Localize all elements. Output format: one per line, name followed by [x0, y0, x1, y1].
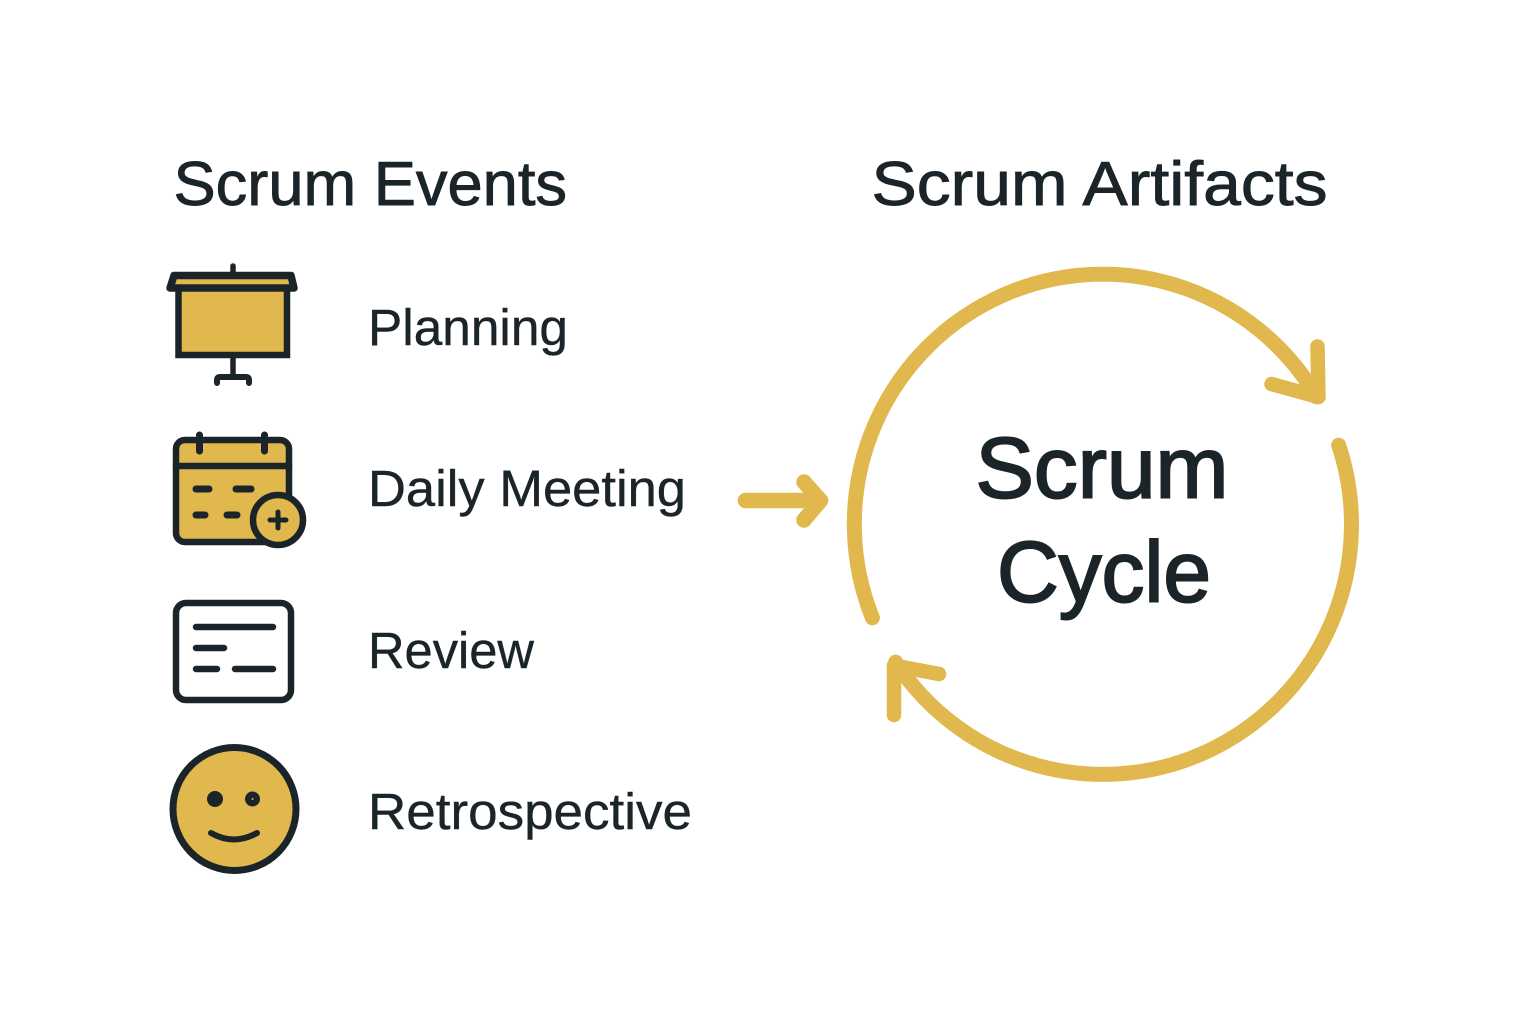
- arrowhead: top right: [1272, 346, 1318, 397]
- icon: projector screen: [170, 266, 294, 383]
- arrowhead: bottom left: [894, 666, 939, 715]
- label: Planning: Planning: [368, 299, 568, 356]
- heading: Scrum Artifacts: Scrum Artifacts: [872, 150, 1328, 219]
- arrow: events to cycle: [746, 482, 820, 520]
- cycle ring with arrows: [854, 274, 1351, 774]
- center label: Scrum Cycle: Scrum: [976, 420, 1228, 516]
- label: Review: Review: [368, 622, 534, 679]
- label: Retrospective: Retrospective: [368, 783, 692, 840]
- icon: smiley face: [173, 748, 296, 870]
- icon: calendar: [176, 435, 303, 545]
- center label: Scrum Cycle: [976, 420, 1228, 620]
- arc: right and bottom: [896, 445, 1351, 774]
- icon: review document: [176, 603, 291, 700]
- arc: top left: [854, 274, 1317, 618]
- heading: Scrum Events: Scrum Events: [174, 150, 567, 219]
- label: Daily Meeting: Daily Meeting: [368, 460, 686, 517]
- center label: Scrum Cycle: Cycle: [997, 524, 1211, 620]
